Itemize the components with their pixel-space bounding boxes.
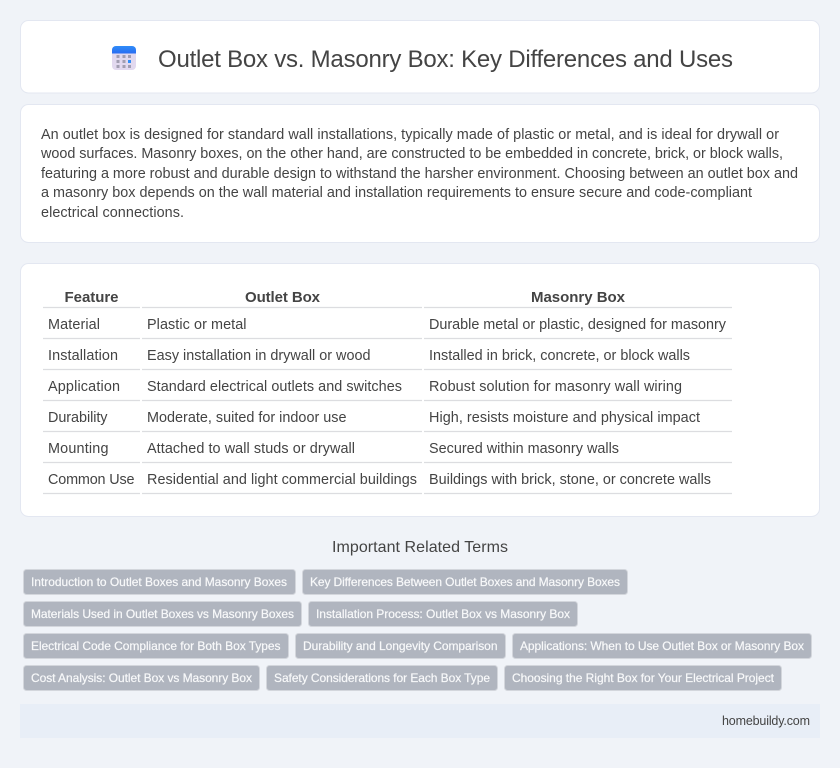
row: mounting: Secured within masonry walls — [429, 441, 619, 457]
chip: Choosing the Right Box for Your Electrical Project — [512, 671, 775, 685]
row: material: Plastic or metal — [147, 317, 246, 333]
related term chips — [24, 570, 812, 690]
footer site name: homebuildy.com — [722, 714, 810, 728]
panel: header — [20, 20, 820, 93]
intro paragraph: featuring a more robust and durable design to withstand the harsher environment. Choosing between an outlet box and — [41, 166, 798, 182]
table header row: Outlet Box — [245, 289, 321, 306]
row: installation: Installed in brick, concrete, or block walls — [429, 348, 690, 364]
row: mounting: Attached to wall studs or drywall — [147, 441, 355, 457]
row: material: Durable metal or plastic, designed for masonry — [429, 317, 727, 333]
row: common use — [43, 472, 732, 494]
row: mounting: Mounting — [48, 441, 108, 457]
table header row: Masonry Box — [531, 289, 626, 306]
chip: Key Differences Between Outlet Boxes and Masonry Boxes — [310, 575, 620, 589]
intro paragraph: a masonry box depends on the wall material and installation requirements to ensure secure and code-compliant — [41, 185, 752, 201]
icon: calendar — [112, 46, 136, 70]
row: common use: Buildings with brick, stone, or concrete walls — [429, 472, 711, 488]
title: Outlet Box vs. Masonry Box: Key Differences and Uses — [158, 46, 733, 73]
chip — [24, 666, 260, 690]
chip — [302, 570, 628, 594]
chip: Electrical Code Compliance for Both Box Types — [31, 639, 280, 653]
row: application: Standard electrical outlets and switches — [147, 379, 402, 395]
panel: intro text — [20, 104, 820, 242]
row: installation: Easy installation in drywall or wood — [147, 348, 370, 364]
footer bar — [20, 704, 820, 738]
intro paragraph — [40, 127, 798, 221]
row: application: Robust solution for masonry wall wiring — [429, 379, 682, 395]
intro paragraph: wood surfaces. Masonry boxes, on the other hand, are constructed to be embedded in concrete, brick, or block walls, — [40, 146, 783, 162]
row: durability: High, resists moisture and physical impact — [429, 410, 700, 426]
row: material — [43, 317, 732, 338]
intro paragraph: electrical connections. — [41, 205, 184, 221]
chip — [512, 634, 812, 658]
row: application: Application — [48, 379, 120, 395]
table header row: Feature — [64, 289, 118, 306]
row: installation — [43, 348, 732, 370]
row: common use: Common Use — [48, 472, 134, 488]
row: durability: Durability — [48, 410, 108, 426]
chip: Applications: When to Use Outlet Box or Masonry Box — [520, 639, 804, 653]
chip: Installation Process: Outlet Box vs Masonry Box — [316, 607, 570, 621]
panel: comparison table — [20, 264, 820, 516]
chip: Materials Used in Outlet Boxes vs Masonry Boxes — [31, 607, 294, 621]
chip — [24, 570, 296, 594]
chip: Introduction to Outlet Boxes and Masonry Boxes — [31, 575, 287, 589]
table header row — [43, 289, 732, 308]
chip — [266, 666, 498, 690]
heading: important related terms: Important Related Terms — [332, 539, 508, 556]
chip: Safety Considerations for Each Box Type — [274, 671, 490, 685]
chip — [504, 666, 782, 690]
row: common use: Residential and light commercial buildings — [147, 472, 417, 488]
row: material: Material — [48, 317, 100, 333]
row: durability: Moderate, suited for indoor use — [147, 410, 346, 426]
chip: Cost Analysis: Outlet Box vs Masonry Box — [31, 671, 252, 685]
chip — [296, 634, 506, 658]
row: application — [43, 379, 732, 400]
row: mounting — [43, 441, 732, 462]
intro paragraph: An outlet box is designed for standard wall installations, typically made of plastic or metal, and is ideal for drywall or — [41, 127, 779, 143]
chip: Durability and Longevity Comparison — [303, 639, 498, 653]
row: installation: Installation — [48, 348, 118, 364]
chip — [308, 602, 578, 626]
row: durability — [43, 410, 732, 432]
chip — [24, 602, 302, 626]
chip — [24, 634, 288, 658]
